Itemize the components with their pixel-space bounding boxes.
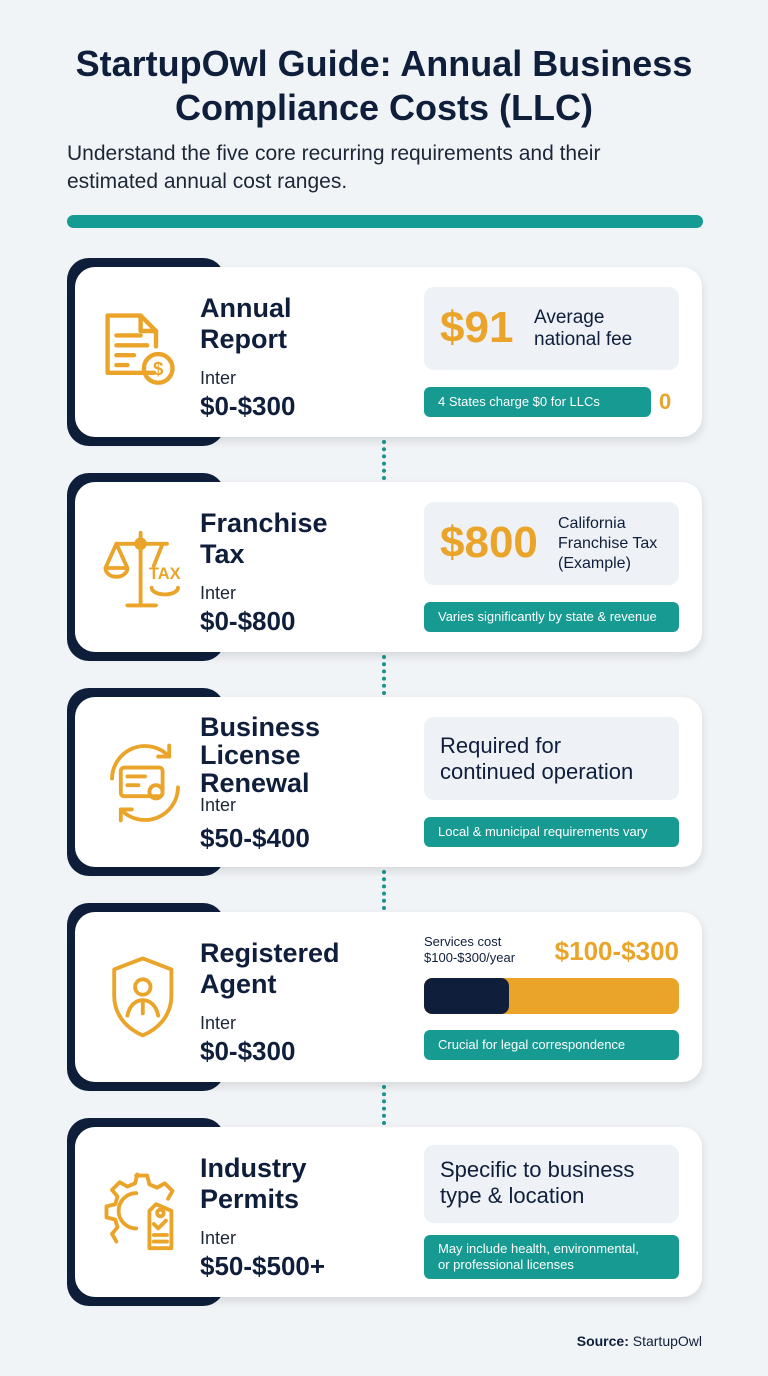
pill note: Crucial for legal correspondence	[438, 1037, 625, 1052]
callout text: continued operation	[440, 759, 633, 784]
connector dots 1	[382, 440, 390, 480]
callout text: Required for	[440, 733, 561, 758]
bar chart: service cost	[424, 934, 679, 1014]
panel: franchise tax	[67, 473, 705, 661]
callout: $800 california	[424, 502, 679, 585]
title: StartupOwl Guide: Annual Business	[76, 43, 692, 84]
cost range: $0-$300	[200, 1036, 295, 1066]
heading: Renewal	[200, 768, 310, 798]
bar chart: service cost: Services cost	[424, 934, 501, 949]
cost range: $50-$400	[200, 823, 310, 853]
pill note	[424, 817, 679, 847]
callout: $800 california: $800	[440, 518, 538, 567]
connector dots 3	[382, 870, 390, 910]
callout text: Specific to business	[440, 1157, 634, 1182]
pill note	[424, 602, 679, 632]
pill note: Local & municipal requirements vary	[438, 824, 648, 839]
cost range: $0-$300	[200, 391, 295, 421]
icon: document with dollar	[105, 313, 175, 385]
callout: $91 average: national fee	[534, 329, 632, 350]
pill note	[424, 387, 651, 417]
heading: Tax	[200, 539, 245, 569]
connector dots 2	[382, 655, 390, 695]
pill note: May include health, environmental,	[438, 1241, 639, 1256]
callout text: type & location	[440, 1183, 584, 1208]
bar chart: service cost: $100-$300	[555, 936, 679, 966]
callout text	[424, 717, 679, 800]
title: Compliance Costs (LLC)	[175, 87, 593, 128]
icon: gear with permit tag	[104, 1172, 174, 1250]
source: Source: StartupOwl	[577, 1333, 702, 1349]
pill note	[424, 1235, 679, 1279]
icon: license with arrows	[110, 744, 180, 822]
heading	[200, 293, 292, 354]
callout: $91 average	[424, 287, 679, 370]
pill note: Varies significantly by state & revenue	[438, 609, 657, 624]
heading: Report	[200, 324, 287, 354]
pill note	[424, 1030, 679, 1060]
bar chart: service cost: $100-$300/year	[424, 950, 515, 965]
label: Inter	[200, 1013, 236, 1033]
heading	[200, 1153, 307, 1214]
subtitle: Understand the five core recurring requirements and their estimated annual cost ranges.	[67, 142, 600, 193]
icon: scales with tax: TAX	[149, 565, 181, 583]
callout text	[424, 1145, 679, 1223]
pill note: 4 States charge $0 for LLCs	[438, 394, 600, 409]
heading: Business	[200, 712, 320, 742]
heading	[200, 712, 320, 798]
label: Inter	[200, 795, 236, 815]
cost range: $50-$500+	[200, 1251, 325, 1281]
callout: $91 average: $91	[440, 303, 513, 352]
label: Inter	[200, 368, 236, 388]
heading: Industry	[200, 1153, 307, 1183]
title	[76, 43, 692, 128]
zero count: 0	[659, 389, 671, 414]
panel: registered agent	[67, 903, 705, 1091]
panel: business license renewal	[67, 688, 705, 876]
label: Inter	[200, 583, 236, 603]
heading: Registered	[200, 938, 340, 968]
heading: Franchise	[200, 508, 328, 538]
icon: scales with tax	[103, 530, 181, 608]
heading	[200, 508, 328, 569]
teal divider bar	[67, 215, 703, 228]
callout: $800 california: Franchise Tax	[558, 535, 657, 552]
cost range: $0-$800	[200, 606, 295, 636]
heading: Permits	[200, 1184, 299, 1214]
heading: License	[200, 740, 301, 770]
callout: $91 average: Average	[534, 307, 604, 328]
icon: document with dollar: $	[153, 358, 164, 379]
label: Inter	[200, 1228, 236, 1248]
pill note: or professional licenses	[438, 1257, 574, 1272]
callout: $800 california: California	[558, 515, 626, 532]
callout: $800 california: (Example)	[558, 555, 631, 572]
heading: Annual	[200, 293, 292, 323]
panel: industry permits	[67, 1118, 705, 1306]
heading: Agent	[200, 969, 276, 999]
icon: shield person	[112, 956, 174, 1038]
panel: annual report	[67, 258, 705, 446]
heading	[200, 938, 340, 999]
connector dots 4	[382, 1085, 390, 1125]
